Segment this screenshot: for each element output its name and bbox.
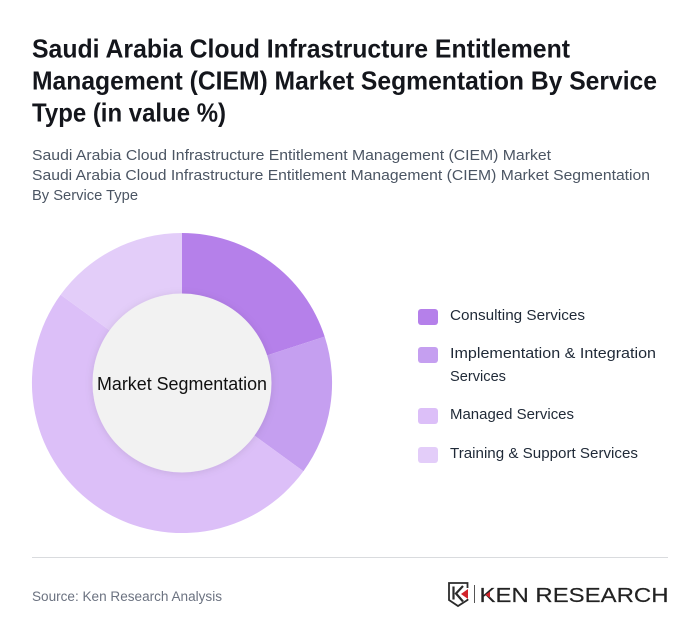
legend item: Managed Services: Managed Services: [450, 406, 574, 423]
donut chart: [32, 233, 332, 533]
subtitle: [32, 147, 650, 204]
icon: red K arrow: [486, 592, 490, 598]
title: [32, 34, 657, 128]
wordmark: KEN RESEARCH: [480, 585, 668, 607]
logo: Ken Research: [449, 583, 668, 607]
icon: shield K: [449, 583, 468, 606]
legend item: Implementation & Integration Services: Implementation & Integration: [450, 345, 656, 362]
legend item: Consulting Services: Consulting Services: [450, 307, 585, 324]
subtitle: Saudi Arabia Cloud Infrastructure Entitlement Management (CIEM) Market Segmentation: [32, 167, 650, 184]
legend item: Training & Support Services: Training & Support Services: [450, 445, 638, 462]
legend item: Implementation & Integration Services: Services: [450, 368, 506, 385]
slice: Implementation & Integration Services: [182, 337, 332, 471]
legend: [418, 307, 656, 463]
slice: Consulting Services: [182, 233, 325, 383]
legend item: Implementation & Integration Services: [418, 345, 656, 385]
title: Saudi Arabia Cloud Infrastructure Entitlement: [32, 34, 570, 64]
title: Management (CIEM) Market Segmentation By Service: [32, 66, 657, 96]
slice: Training & Support Services: [61, 233, 182, 383]
title: Type (in value %): [32, 98, 226, 128]
donut centre: [92, 294, 272, 472]
subtitle: Saudi Arabia Cloud Infrastructure Entitlement Management (CIEM) Market: [32, 147, 552, 164]
subtitle: By Service Type: [32, 187, 138, 204]
slice: Managed Services: [32, 295, 303, 533]
centre label: Market Segmentation: [97, 374, 267, 394]
source note: Source: Ken Research Analysis: [32, 589, 222, 604]
